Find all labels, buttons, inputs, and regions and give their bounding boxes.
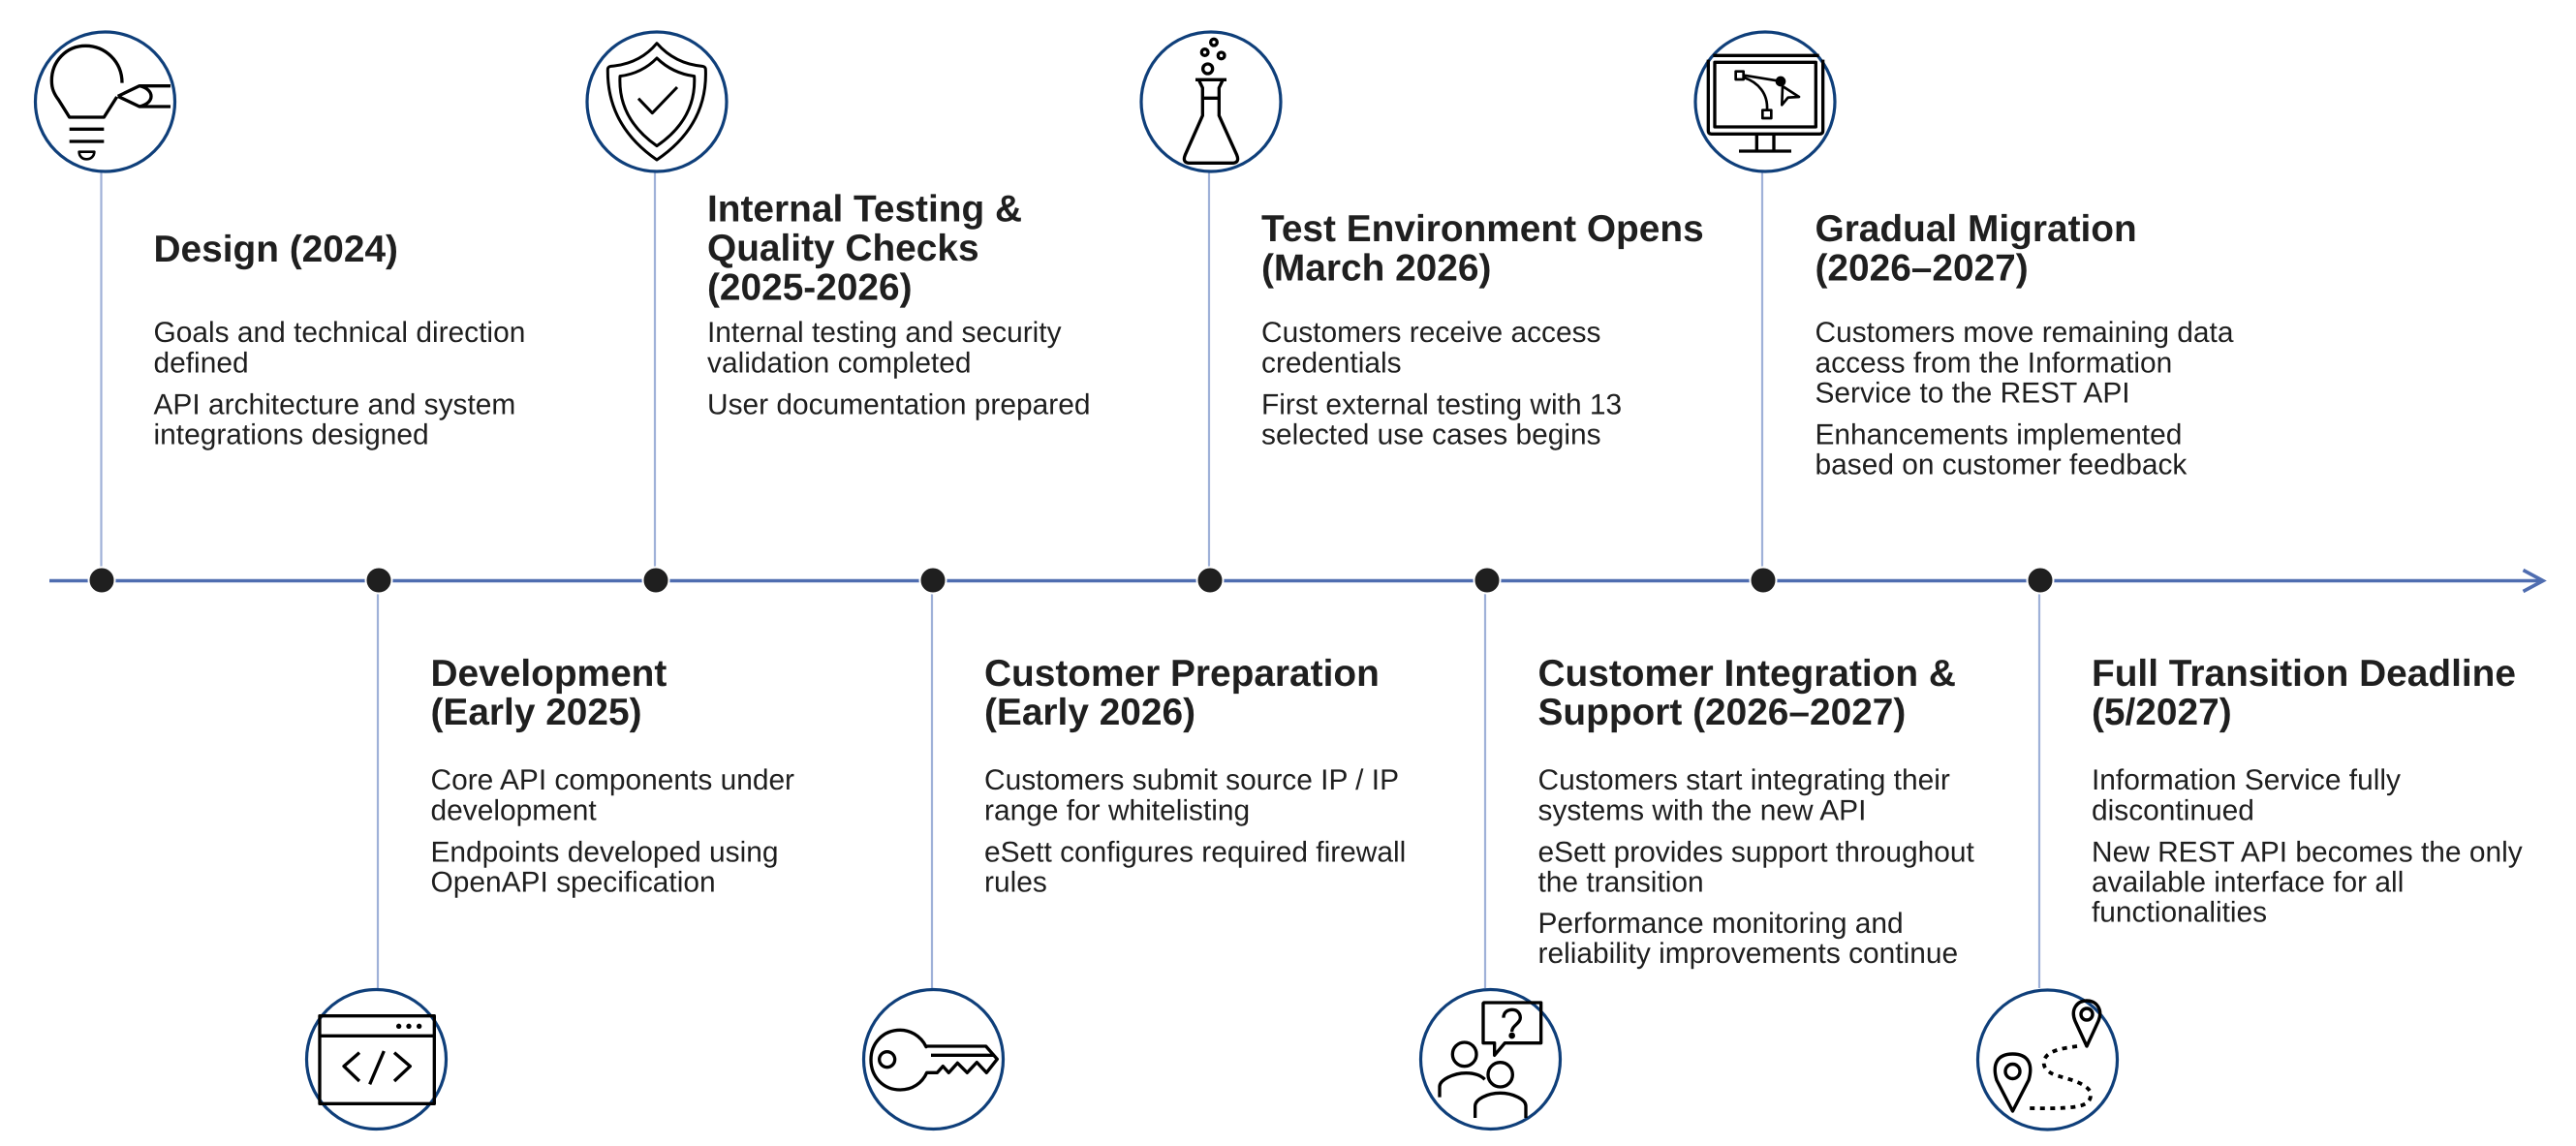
- heading: internal testing: (2025-2026): [707, 267, 913, 308]
- text block: customer integration: eSett provides support throughout: [1538, 837, 1975, 868]
- text block: test environment: Customers receive access: [1261, 317, 1600, 349]
- text block: design: [153, 317, 525, 451]
- text block: customer integration: Performance monitoring and: [1538, 908, 1904, 940]
- text block: gradual migration: Service to the REST API: [1816, 378, 2130, 409]
- text block: customer integration: reliability improvements continue: [1538, 938, 1958, 970]
- panel: development: [430, 653, 794, 899]
- icon: code window: [306, 990, 446, 1130]
- text block: test environment: credentials: [1261, 347, 1402, 380]
- heading: development: Development: [430, 653, 667, 695]
- panel: customer preparation: [984, 653, 1406, 899]
- panel: gradual migration: [1816, 208, 2234, 480]
- text block: internal testing: Internal testing and security: [707, 317, 1062, 349]
- panel: full transition deadline: [2092, 653, 2523, 928]
- icon: flask: [1141, 32, 1281, 171]
- icon: light bulb with hand: [35, 32, 174, 171]
- panel: test environment: [1261, 208, 1704, 451]
- text block: customer integration: systems with the new API: [1538, 794, 1866, 827]
- icon: people with question bubble: [1420, 990, 1560, 1130]
- heading: full transition deadline: (5/2027): [2092, 692, 2232, 733]
- heading: gradual migration: (2026–2027): [1816, 248, 2029, 289]
- heading: customer integration: Customer Integration &: [1538, 653, 1956, 695]
- text block: design: API architecture and system: [153, 389, 515, 420]
- text block: customer integration: the transition: [1538, 866, 1704, 899]
- text block: design: Goals and technical direction: [153, 317, 525, 349]
- text block: design: integrations designed: [153, 418, 429, 451]
- text block: test environment: [1261, 317, 1622, 451]
- heading: internal testing: Internal Testing &: [707, 188, 1022, 231]
- heading: customer preparation: [984, 653, 1380, 733]
- text block: full transition deadline: Information Service fully: [2092, 764, 2401, 796]
- text block: internal testing: User documentation prepared: [707, 389, 1090, 420]
- text block: full transition deadline: [2092, 764, 2523, 928]
- text block: customer preparation: rules: [984, 866, 1047, 899]
- text block: development: Core API components under: [430, 764, 794, 796]
- text block: full transition deadline: available interface for all: [2092, 866, 2404, 899]
- icon: route with map pins: [1978, 990, 2118, 1130]
- text block: gradual migration: Enhancements implemented: [1816, 418, 2182, 451]
- text block: development: Endpoints developed using: [430, 837, 778, 868]
- icon: key: [864, 990, 1004, 1130]
- text block: full transition deadline: discontinued: [2092, 794, 2254, 827]
- text block: gradual migration: Customers move remaining data: [1816, 317, 2234, 349]
- heading: internal testing: [707, 188, 1022, 308]
- heading: development: (Early 2025): [430, 692, 642, 733]
- timeline markers: [89, 568, 2054, 593]
- connector lines: [101, 172, 2039, 988]
- text block: development: OpenAPI specification: [430, 866, 716, 899]
- text block: test environment: selected use cases begins: [1261, 418, 1601, 451]
- heading: test environment: Test Environment Opens: [1261, 208, 1704, 250]
- panel: internal testing: [707, 188, 1090, 420]
- heading: customer preparation: (Early 2026): [984, 692, 1195, 733]
- text block: full transition deadline: functionalities: [2092, 897, 2267, 928]
- text block: customer preparation: [984, 764, 1406, 899]
- heading: customer integration: [1538, 653, 1956, 733]
- heading: test environment: (March 2026): [1261, 248, 1491, 289]
- heading: internal testing: Quality Checks: [707, 228, 979, 269]
- heading: full transition deadline: Full Transition Deadline: [2092, 653, 2516, 695]
- icon: monitor with bezier curve: [1695, 32, 1835, 171]
- text block: test environment: First external testing with 13: [1261, 389, 1622, 420]
- heading: development: [430, 653, 667, 733]
- heading: gradual migration: [1816, 208, 2137, 289]
- text block: customer preparation: range for whitelisting: [984, 794, 1250, 827]
- heading: customer integration: Support (2026–2027): [1538, 692, 1906, 733]
- text block: customer preparation: Customers submit source IP / IP: [984, 764, 1399, 796]
- text block: development: development: [430, 794, 597, 827]
- heading: design: Design (2024): [153, 229, 398, 270]
- text block: internal testing: validation completed: [707, 347, 972, 380]
- heading: test environment: [1261, 208, 1704, 289]
- text block: customer integration: [1538, 764, 1975, 970]
- text block: customer preparation: eSett configures required firewall: [984, 837, 1406, 868]
- timeline arrow: [49, 570, 2543, 591]
- text block: customer integration: Customers start integrating their: [1538, 764, 1950, 796]
- text block: gradual migration: [1816, 317, 2234, 480]
- text block: gradual migration: access from the Information: [1816, 347, 2172, 380]
- panel: design: [153, 229, 525, 451]
- icon: shield with check: [587, 32, 727, 171]
- text block: gradual migration: based on customer feedback: [1816, 449, 2187, 480]
- text block: design: defined: [153, 347, 249, 380]
- heading: customer preparation: Customer Preparation: [984, 653, 1380, 695]
- heading: full transition deadline: [2092, 653, 2516, 733]
- text block: full transition deadline: New REST API becomes the only: [2092, 837, 2523, 868]
- text block: development: [430, 764, 794, 899]
- heading: gradual migration: Gradual Migration: [1816, 208, 2137, 250]
- panel: customer integration: [1538, 653, 1975, 970]
- text block: internal testing: [707, 317, 1090, 420]
